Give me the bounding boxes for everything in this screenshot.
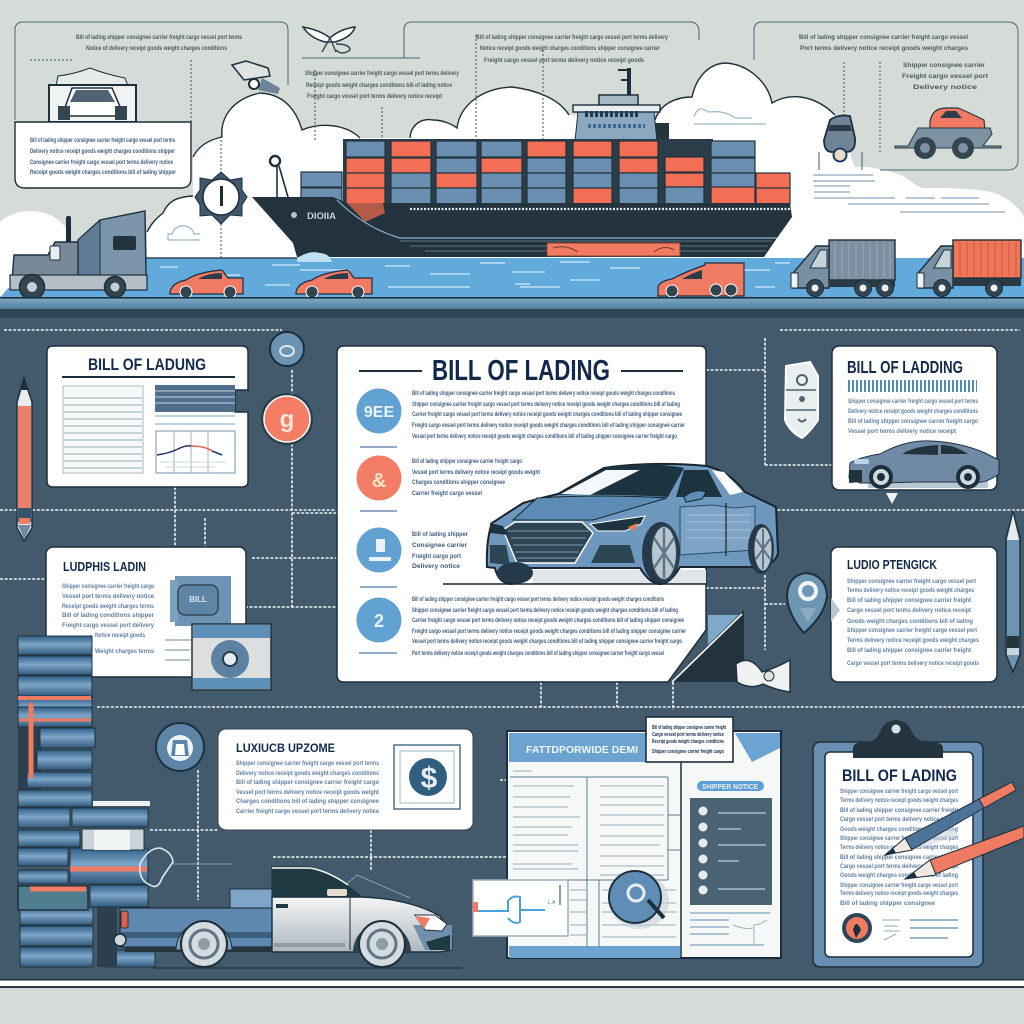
stamped label image	[165, 576, 231, 660]
card heading: BILL OF LADUNG	[88, 355, 206, 374]
card: bill of lading left	[47, 346, 248, 487]
vehicle: red car one	[170, 270, 243, 298]
clipboard with bill of lading: Goods weight charges conditions bill of lading	[840, 827, 958, 833]
clipboard with bill of lading: Shipper consignee carrier freight cargo vessel port	[840, 789, 958, 795]
marker triangle under card	[886, 493, 898, 504]
sticky note: Shipper consignee carrier freight cargo	[652, 749, 724, 755]
badge: coral circle: g	[280, 406, 294, 433]
clipboard with bill of lading: Terms delivery notice receipt goods weight charges	[840, 798, 959, 804]
card: delivery notes right	[831, 547, 997, 682]
step three: icon and text: Freight cargo port	[412, 554, 461, 560]
card: ledger notes: Notice receipt goods	[95, 633, 146, 639]
card: customs note: Bill of lading shipper consignee carrier freight cargo	[236, 780, 379, 786]
icon: gear gauge	[195, 172, 247, 224]
step four: icon and text: Vessel port terms delivery notice receipt goods weight charges conditions bill of lading shipper consignee carrier freight cargo	[412, 639, 682, 645]
crane	[270, 156, 288, 197]
step one: icon and text: Carrier freight cargo vessel port terms delivery notice receipt goods weight charges conditions bill of lading shipper consignee	[412, 412, 682, 418]
icon: dollar sign	[394, 745, 460, 809]
text card: top left: Delivery notice receipt goods weight charges conditions shipper	[30, 149, 176, 155]
card heading: LUXIUCB UPZOME	[236, 741, 335, 755]
card heading: LUDPHIS LADIN	[63, 560, 146, 574]
pencil left	[17, 378, 32, 541]
dashed connector lines	[0, 330, 1024, 900]
ledger table	[63, 386, 143, 473]
vehicle: red car two	[296, 270, 372, 298]
card: customs note: Charges conditions bill of lading shipper consignee	[236, 799, 380, 805]
pen: coral	[905, 826, 1024, 879]
card: delivery notes right: Goods weight charges conditions bill of lading	[847, 619, 973, 625]
clipboard heading: BILL OF LADING	[842, 766, 957, 785]
hull	[252, 197, 792, 257]
top text: frame one: Notice of delivery receipt goods weight charges conditions	[86, 46, 228, 52]
top text: frame two	[476, 35, 669, 64]
top text: centre note: Receipt goods weight charges conditions bill of lading notice	[306, 83, 453, 89]
arrow tab on card	[831, 598, 840, 622]
text card: top left: Receipt goods weight charges conditions bill of lading shipper	[30, 170, 177, 176]
badge: coral circle	[261, 393, 313, 445]
icon: car on trailer	[895, 108, 1001, 159]
icon: ribbon bow	[736, 660, 790, 692]
card: customs note: Delivery notice receipt goods weight charges conditions	[236, 771, 380, 777]
card: customs note	[218, 729, 473, 830]
step one: icon and text: 9EE	[364, 404, 394, 421]
text card: top left	[15, 122, 191, 188]
stacked paper column	[18, 636, 155, 967]
icon: location pin	[787, 573, 827, 633]
sticky note: Bill of lading shipper consignee carrier freight	[652, 725, 726, 731]
top text: frame one: Bill of lading shipper consignee carrier freight cargo vessel port terms	[76, 35, 243, 41]
step two: icon and text: Carrier freight cargo vessel	[412, 491, 482, 497]
top text: frame three: Delivery notice	[913, 85, 978, 91]
top text: frame three: Port terms delivery notice receipt goods weight charges	[800, 46, 969, 52]
right page status pill	[697, 781, 764, 791]
step one: icon and text: Vessel port terms delivery notice receipt goods weight charges conditions bill of lading shipper consignee carrier freight cargo	[412, 434, 677, 440]
mini chart	[690, 913, 770, 945]
sticky note: Cargo vessel port terms delivery notice	[652, 732, 724, 738]
step four: icon and text: Freight cargo vessel port terms delivery notice receipt goods weight charges conditions bill of lading shipper consignee carrier	[412, 629, 686, 635]
outlined info frames	[15, 22, 1018, 170]
clipboard with bill of lading: Goods weight charges conditions bill of lading	[840, 873, 958, 879]
card: customs note: Vessel port terms delivery notice receipt goods weight	[236, 790, 379, 796]
pen: blue	[885, 782, 1016, 855]
card: customs note: Carrier freight cargo vessel port terms delivery notice	[236, 809, 380, 815]
vehicle: semi truck	[10, 211, 147, 300]
icon: airplane	[303, 27, 355, 53]
clipboard with bill of lading: Terms delivery notice receipt goods weight charges	[840, 845, 959, 851]
card: ledger notes: Shipper consignee carrier freight cargo	[62, 584, 154, 590]
top text: frame two: Notice receipt goods weight charges conditions shipper consignee carrier	[480, 46, 661, 52]
step four: icon and text: Shipper consignee carrier freight cargo vessel port terms delivery notice receipt goods weight charges conditions bill of lading	[412, 608, 678, 614]
step two: icon and text: Vessel port terms delivery notice receipt goods weight	[412, 470, 540, 476]
card: ledger notes: Bill of lading conditions shipper	[62, 613, 155, 619]
card heading: LUDIO PTENGICK	[847, 558, 937, 572]
card: delivery notes right: Cargo vessel port terms delivery notice receipt goods	[847, 661, 980, 667]
line chart	[156, 431, 235, 473]
clipboard with bill of lading: Bill of lading shipper consignee	[840, 901, 936, 907]
clipboard with bill of lading: Shipper consignee carrier freight cargo vessel port	[840, 836, 958, 842]
stamped label image: BILL	[189, 595, 207, 604]
main title: BILL OF LADING	[432, 355, 610, 387]
folded page corner	[670, 610, 744, 682]
step one: icon and text: Bill of lading shipper consignee carrier freight cargo vessel port terms delivery notice receipt goods weight charges conditions	[412, 391, 675, 397]
step one: icon and text	[356, 388, 685, 447]
top scene: sky clouds	[0, 63, 1024, 296]
top text: frame two: Bill of lading shipper consignee carrier freight cargo vessel port terms delivery	[476, 35, 669, 41]
sketched text lines in cloud	[813, 175, 1005, 212]
clipboard with bill of lading: Bill of lading shipper consignee carrier freight	[840, 855, 958, 861]
glowing outline blob	[140, 848, 232, 886]
step one: icon and text: Freight cargo vessel port terms delivery notice receipt goods weight charges conditions bill of lading shipper consignee carrier	[412, 423, 685, 429]
card heading: BILL OF LADDING	[847, 357, 963, 377]
icon: hand cart	[232, 61, 280, 94]
small signal diagram	[473, 880, 568, 936]
superstructure	[573, 68, 682, 157]
icon: car rear view	[819, 116, 862, 170]
clipboard with bill of lading: Cargo vessel port terms delivery notice receipt	[840, 817, 958, 823]
pickup truck	[114, 867, 462, 968]
vehicle: blue cargo truck	[791, 240, 895, 296]
step four: icon and text: Carrier freight cargo vessel port terms delivery notice receipt goods weight charges conditions bill of lading shipper consignee	[412, 618, 684, 624]
blue header: FATTDPORWIDE DEMI	[526, 744, 638, 756]
dark main panel	[0, 309, 1024, 988]
card: ledger notes: Freight cargo vessel port delivery	[62, 623, 155, 629]
large blue sedan	[443, 464, 778, 584]
top text: frame three: Freight cargo vessel port	[902, 74, 988, 80]
top text: centre note	[305, 71, 460, 100]
card: bill of lading with sedan: Bill of lading shipper consignee carrier freight cargo	[848, 419, 978, 425]
card: delivery notes right: Bill of lading shipper consignee carrier freight	[847, 598, 971, 604]
water	[0, 258, 1024, 298]
right page status pill: SHIPPER NOTICE	[702, 784, 758, 791]
card: delivery notes right: Shipper consignee carrier freight cargo vessel port	[847, 628, 977, 634]
clip	[853, 720, 943, 758]
top text: centre note: Shipper consignee carrier freight cargo vessel port terms delivery	[305, 71, 460, 77]
top text: centre note: Freight cargo vessel port terms delivery notice receipt	[307, 94, 442, 100]
vehicle: orange van	[658, 263, 744, 297]
sticky note: Receipt goods weight charges conditions	[652, 739, 724, 745]
badge: clipboard circle	[156, 723, 204, 771]
seal and signature	[842, 913, 958, 943]
top text: frame three: Bill of lading shipper consignee carrier freight cargo vessel	[799, 35, 968, 41]
clipboard with bill of lading	[813, 720, 983, 967]
card: delivery notes right: Terms delivery notice receipt goods weight charges	[847, 638, 980, 644]
step three: icon and text: Bill of lading shipper	[412, 532, 469, 538]
step three: icon and text: Consignee carrier	[412, 543, 468, 549]
cargo ship	[252, 68, 792, 257]
sticky note	[646, 717, 733, 762]
step four: icon and text: Bill of lading shipper consignee carrier freight cargo vessel port terms delivery notice receipt goods weight charges conditions	[412, 597, 664, 603]
card: delivery notes right: Cargo vessel port terms delivery notice receipt	[847, 608, 971, 614]
step two: icon and text: Bill of lading shipper consignee carrier freight cargo	[412, 459, 522, 465]
step four: icon and text: 2	[374, 611, 384, 631]
card: delivery notes right: Terms delivery notice receipt goods weight charges	[847, 588, 975, 594]
badge: sealed key button	[609, 871, 669, 929]
road strip	[0, 297, 1024, 309]
pen right	[1006, 512, 1020, 672]
step two: icon and text: &	[372, 470, 386, 492]
card: ledger notes: Weight charges terms	[95, 649, 155, 655]
step three: icon and text	[356, 528, 469, 587]
text card: top left: Bill of lading shipper consignee carrier freight cargo vessel port terms	[30, 138, 175, 144]
top text: frame two: Freight cargo vessel port terms delivery notice receipt goods	[484, 58, 645, 64]
card: bill of lading with sedan: Delivery notice receipt goods weight charges conditions	[848, 409, 979, 415]
card: bill of lading with sedan	[832, 346, 999, 490]
document spread	[507, 731, 781, 958]
step two: icon and text: Charges conditions shipper consignee	[412, 480, 506, 486]
step one: icon and text: Shipper consignee carrier freight cargo vessel port terms delivery notice receipt goods weight charges conditions bill of lading	[412, 402, 680, 408]
main card: bill of lading	[337, 346, 706, 682]
clipboard with bill of lading: Terms delivery notice receipt goods weight charges	[840, 891, 959, 897]
small cloud sketch	[168, 109, 766, 240]
dark table rows	[155, 385, 235, 424]
small signal diagram: L.A	[548, 900, 556, 906]
step four: icon and text: Port terms delivery notice receipt goods weight charges conditions bill of lading shipper consignee carrier freight cargo vessel	[412, 651, 664, 657]
icon: dollar sign: $	[421, 762, 438, 795]
step two: icon and text	[356, 456, 540, 511]
left page lines	[513, 771, 664, 875]
top text: frame three: Shipper consignee carrier	[903, 63, 986, 69]
step four: icon and text	[356, 597, 686, 657]
top text: frame three	[799, 35, 988, 91]
seal picture	[192, 624, 271, 690]
coral band on hull	[547, 243, 680, 256]
vehicle: coral cargo truck	[917, 240, 1021, 296]
blue header	[509, 733, 780, 762]
clipboard with bill of lading: Bill of lading shipper consignee carrier freight	[840, 808, 958, 814]
card: ledger notes: Receipt goods weight charges terms	[62, 604, 155, 610]
text card: top left: Consignee carrier freight cargo vessel port terms delivery notice	[30, 160, 174, 166]
card: ledger notes	[46, 547, 246, 677]
icon: car in frame	[49, 68, 136, 122]
checklist panel	[690, 798, 772, 905]
splash at bow	[297, 252, 332, 262]
card: delivery notes right: Bill of lading shipper consignee carrier freight	[847, 648, 971, 654]
barcode	[848, 380, 977, 392]
card: delivery notes right: Shipper consignee carrier freight cargo vessel port	[847, 579, 976, 585]
card: ledger notes: Vessel port terms delivery notice	[62, 594, 155, 600]
card: bill of lading with sedan: Vessel port terms delivery notice receipt	[848, 429, 956, 435]
clipboard with bill of lading: Cargo vessel port terms delivery notice receipt	[840, 864, 958, 870]
card: bill of lading with sedan: Shipper consignee carrier freight cargo vessel port terms	[848, 399, 979, 405]
hull name: DIOIIA	[307, 211, 337, 221]
containers	[301, 141, 790, 204]
step three: icon and text: Delivery notice	[412, 564, 461, 570]
top text: frame one	[76, 35, 243, 52]
clipboard with bill of lading: Shipper consignee carrier freight cargo vessel port	[840, 883, 958, 889]
card: customs note: Shipper consignee carrier freight cargo vessel port terms	[236, 761, 380, 767]
side-view sedan	[849, 441, 999, 489]
icon: stacked shields	[785, 362, 818, 438]
badge: blue circle	[270, 332, 304, 366]
dotted leader lines	[30, 35, 880, 262]
